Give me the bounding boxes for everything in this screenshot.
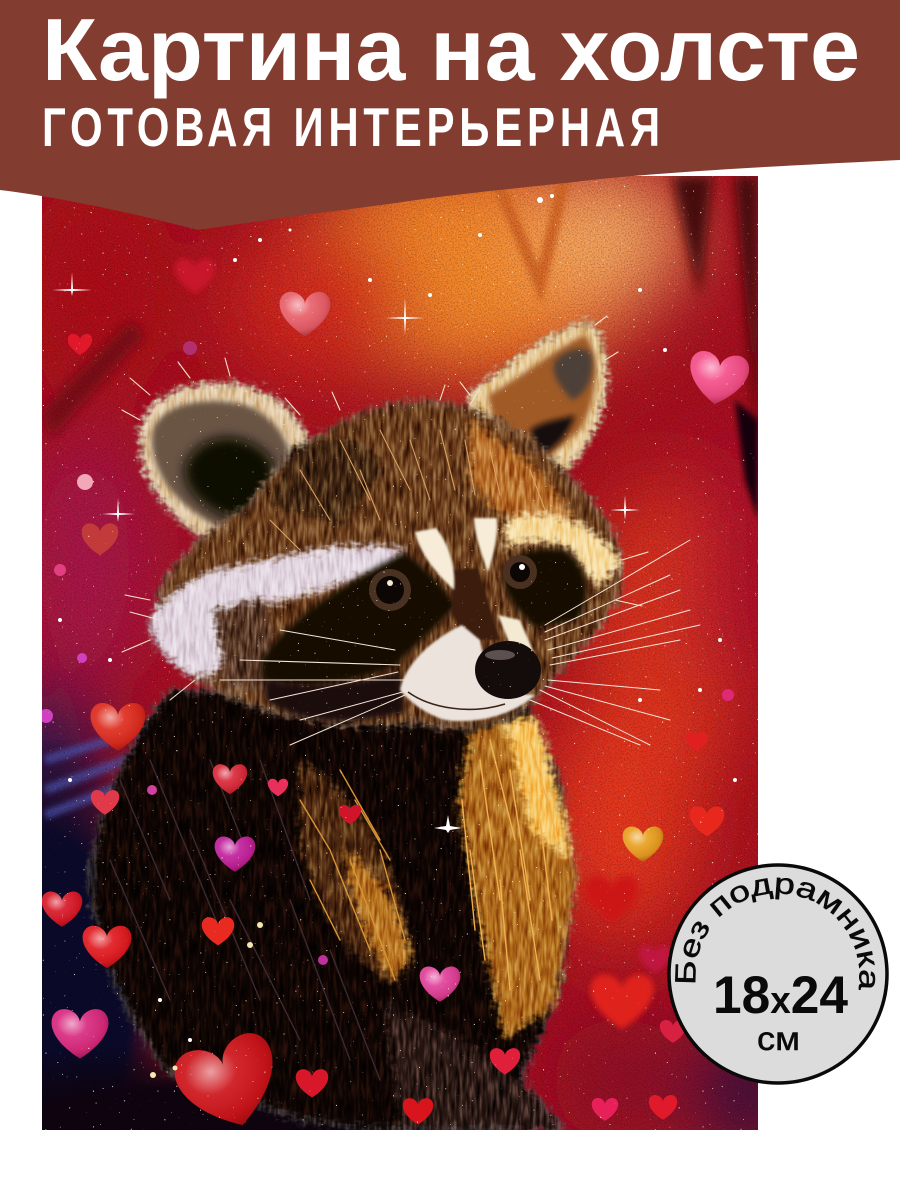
painting: raccoon among hearts [42, 176, 758, 1130]
top banner [0, 0, 900, 230]
badge arc text: Без подрамника [675, 878, 876, 990]
raccoon head [150, 402, 622, 728]
whiskers [220, 540, 700, 745]
heart highlights [42, 292, 751, 1141]
muzzle [400, 625, 535, 721]
size badge [667, 863, 889, 1085]
painting background [42, 176, 758, 1130]
brown nose ridge [452, 568, 500, 640]
soft background hearts [175, 259, 671, 1029]
forehead white stripes [415, 518, 497, 590]
star specks [42, 176, 758, 1130]
subtitle: ГОТОВАЯ ИНТЕРЬЕРНАЯ [42, 98, 660, 158]
title: Картина на холсте [42, 0, 860, 99]
dark navy lower-left [42, 742, 166, 1106]
raccoon [91, 316, 700, 1130]
black mask [262, 549, 587, 685]
background grain [42, 176, 758, 1130]
fur strokes [122, 316, 648, 700]
hearts [42, 259, 751, 1141]
badge unit: см [757, 1020, 800, 1057]
dark floor [42, 1050, 520, 1130]
raccoon left ear [140, 383, 318, 545]
raccoon right ear [468, 322, 606, 480]
dark tree trunk right [665, 176, 758, 427]
raccoon body [91, 690, 576, 1130]
eyes [369, 569, 411, 611]
badge size: 18x24 [713, 966, 849, 1025]
nose [475, 641, 541, 699]
sparkles [39, 194, 737, 1078]
